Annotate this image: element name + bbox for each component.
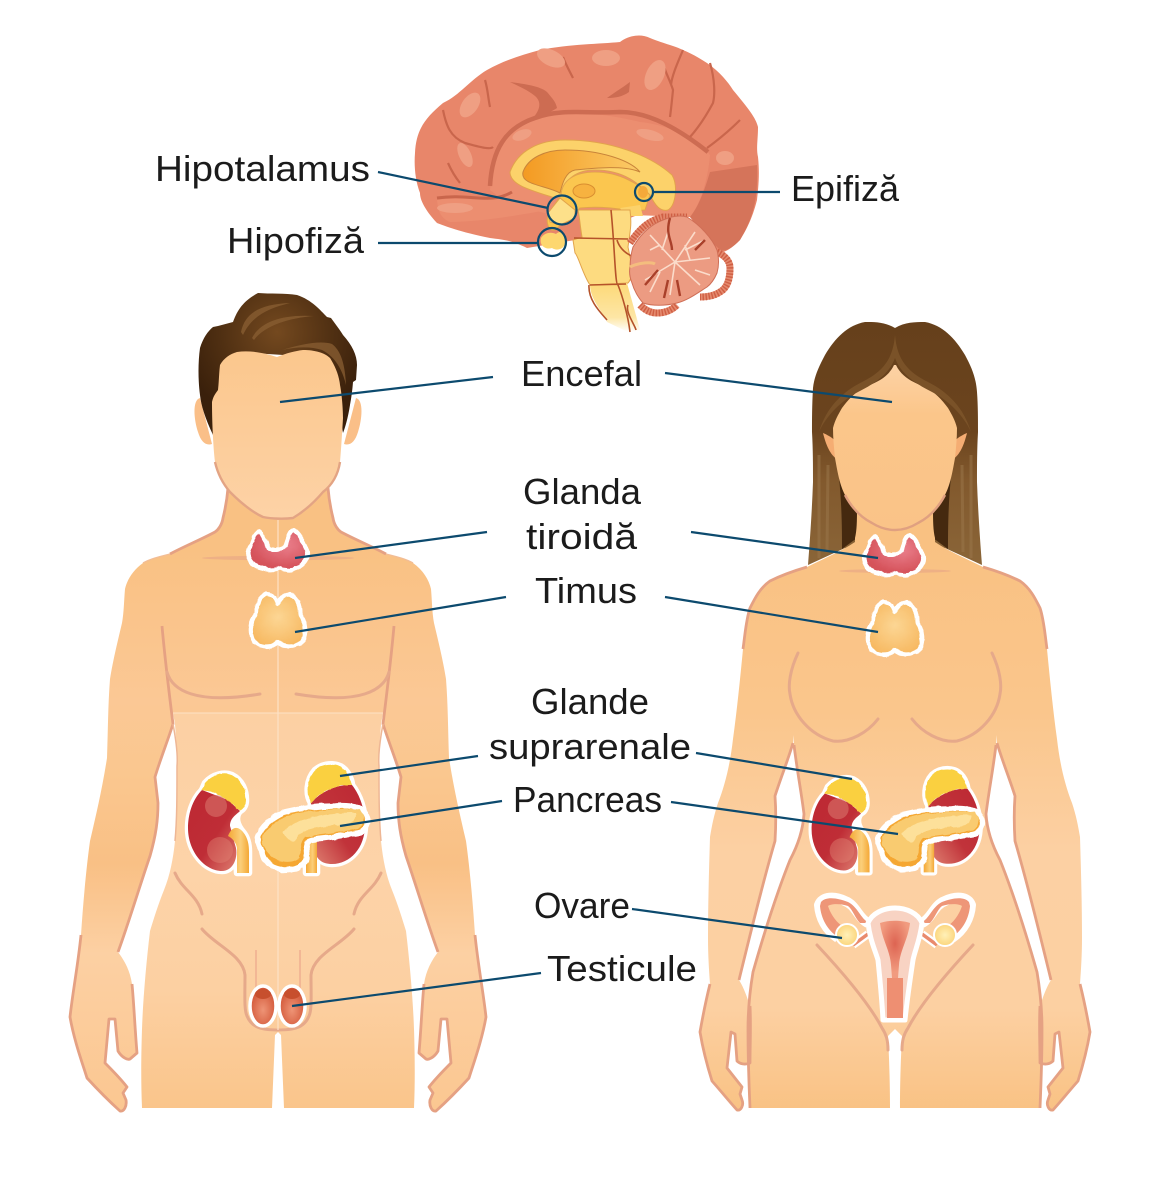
label: Ovare: Ovare [534, 885, 630, 926]
female kidneys, adrenal glands and pancreas [812, 769, 983, 872]
brain [415, 35, 759, 332]
label: Pancreas: Pancreas [513, 779, 662, 820]
female thymus [868, 602, 922, 654]
brainstem [573, 210, 640, 332]
male thymus [251, 594, 305, 646]
male testicles [250, 986, 305, 1026]
label: Glande suprarenale: suprarenale [489, 726, 691, 767]
cerebellum [630, 216, 730, 313]
label: Glande suprarenale [489, 681, 691, 767]
male ears and hair [194, 293, 362, 444]
label: Glanda tiroidă [523, 471, 642, 557]
male torso and arms [70, 480, 486, 1111]
female uterus and ovaries [819, 898, 971, 1020]
cerebrum [415, 35, 759, 253]
male face [212, 350, 343, 519]
pituitary gland [541, 232, 566, 250]
label: Timus: Timus [535, 570, 637, 611]
corpus callosum and midbrain [510, 140, 675, 230]
label: Epifiză: Epifiză [791, 168, 900, 209]
female ears and face [819, 335, 971, 530]
label: Encefal: Encefal [521, 353, 642, 394]
leader lines and markers [280, 172, 898, 1006]
male kidneys, adrenal glands and pancreas [188, 764, 368, 873]
label: Glande suprarenale: Glande [531, 681, 649, 722]
figure: female body [700, 322, 1090, 1110]
label: Glanda tiroidă: tiroidă [526, 516, 638, 557]
label: Hipotalamus: Hipotalamus [155, 148, 370, 189]
figure: male body [70, 293, 486, 1111]
female torso and arms [700, 500, 1090, 1110]
label: Hipofiză: Hipofiză [227, 220, 365, 261]
label: Testicule: Testicule [547, 948, 697, 989]
female hair [808, 322, 982, 565]
label: Glanda tiroidă: Glanda [523, 471, 642, 512]
male thyroid [248, 530, 308, 570]
female thyroid [864, 535, 924, 575]
